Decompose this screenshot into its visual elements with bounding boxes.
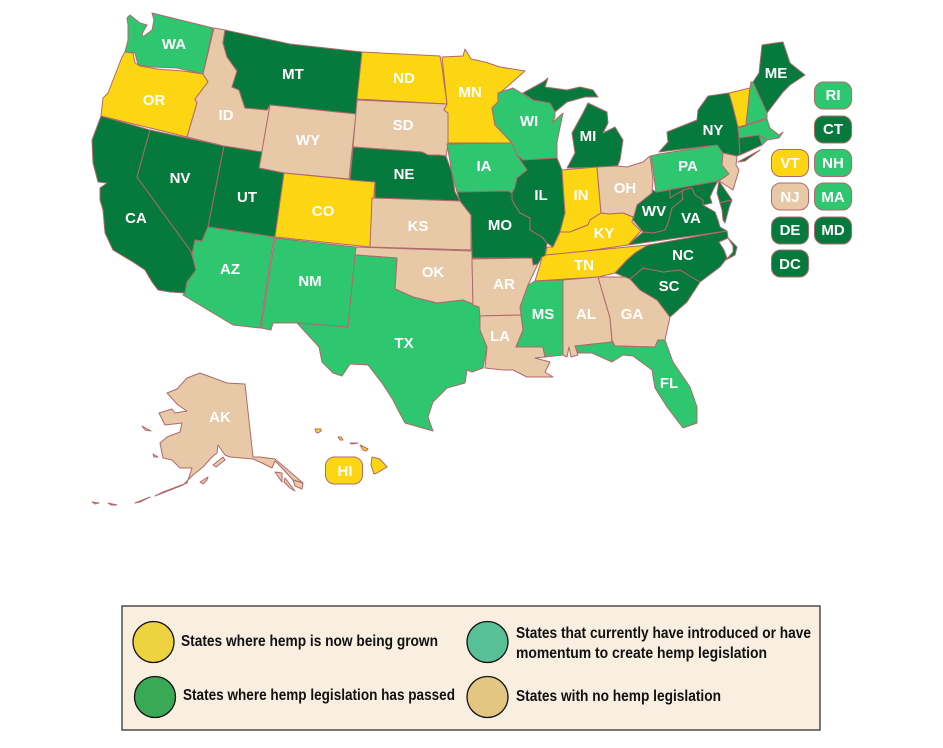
state: KS — [370, 198, 471, 250]
state: IN: IN — [574, 187, 588, 204]
state: NH — [746, 82, 767, 125]
state: VA — [628, 188, 727, 245]
state: AK — [92, 373, 303, 505]
state: CO: CO — [312, 203, 335, 220]
state chips: small states — [326, 82, 852, 484]
state: MN: MN — [458, 84, 482, 101]
chip: DC — [772, 250, 808, 277]
state: NY — [659, 93, 760, 162]
state: VA: VA — [681, 210, 701, 227]
state: MO: MO — [488, 217, 512, 234]
chip: NH: NH — [822, 155, 844, 172]
state: WA: WA — [162, 36, 186, 53]
state: ND: ND — [393, 70, 415, 87]
chip: MA — [814, 183, 852, 210]
legend item: introduced or momentum — [467, 622, 811, 662]
state: WI — [492, 88, 563, 160]
state: ID: ID — [218, 107, 234, 124]
legend item: introduced or momentum: States that currently have introduced or have — [516, 625, 811, 642]
state: MS: MS — [532, 306, 554, 323]
chip: RI — [814, 82, 852, 109]
state: SD: SD — [393, 117, 414, 134]
state: NC — [615, 231, 737, 282]
state: TN: TN — [574, 257, 594, 274]
state: ID — [187, 28, 270, 152]
legend item: legislation passed: States where hemp legislation has passed — [183, 687, 455, 704]
state: AK: AK — [209, 409, 231, 426]
state: OR — [101, 52, 208, 137]
chip: MD: MD — [821, 222, 845, 239]
state: MT — [223, 30, 362, 114]
chip: DE: DE — [780, 222, 800, 239]
state: TN — [535, 245, 648, 281]
state: OR: OR — [143, 92, 165, 109]
state: PA: PA — [678, 158, 698, 175]
state: CO — [275, 173, 375, 247]
legend item: hemp now being grown — [133, 622, 438, 662]
state: ME — [753, 42, 805, 113]
legend item: no legislation — [467, 676, 721, 718]
state: SC: SC — [659, 278, 680, 295]
state: DE — [717, 181, 732, 203]
state: UT: UT — [237, 189, 257, 206]
state: AL: AL — [576, 306, 596, 323]
legend item: legislation passed — [134, 676, 455, 718]
state: UT — [208, 146, 284, 237]
state: ND — [357, 52, 447, 104]
state: FL: FL — [660, 375, 678, 392]
state: MA — [738, 119, 783, 140]
state: GA: GA — [621, 306, 643, 323]
state: IL: IL — [534, 187, 548, 204]
state: WV — [633, 190, 683, 233]
state: WV: WV — [642, 203, 666, 220]
state: HI islands — [315, 429, 387, 474]
state: OK — [355, 247, 473, 305]
state: NV: NV — [170, 170, 190, 187]
state: KS: KS — [408, 218, 428, 235]
state: AZ — [183, 227, 274, 328]
state: TX — [297, 255, 487, 431]
state: MO — [457, 191, 547, 265]
state: NE — [350, 147, 460, 201]
state: NM — [261, 238, 356, 330]
state: MI: MI — [580, 128, 596, 145]
state: TX: TX — [394, 335, 414, 352]
state: ME: ME — [765, 65, 787, 82]
chip: VT — [772, 150, 808, 176]
state: IL — [512, 155, 565, 247]
state: WY — [259, 105, 356, 179]
state: SD — [353, 100, 448, 156]
state: VT — [729, 88, 750, 127]
state: CA: CA — [125, 210, 147, 227]
state: OH — [597, 156, 653, 217]
state: AL — [563, 277, 612, 357]
chip: HI — [326, 457, 362, 484]
state: NE: NE — [394, 166, 414, 183]
chip: NJ — [772, 183, 808, 210]
state: NM: NM — [298, 273, 322, 290]
state: CT — [739, 135, 762, 155]
state: IA: IA — [476, 158, 492, 175]
state: IA — [447, 143, 527, 193]
state: MI — [523, 78, 623, 168]
chip: MD — [814, 217, 852, 244]
state: AZ: AZ — [220, 261, 240, 278]
legend panel — [122, 606, 820, 730]
state: NY: NY — [703, 122, 723, 139]
chip: MA: MA — [821, 189, 845, 206]
state: FL — [575, 340, 697, 428]
state: NJ — [719, 153, 739, 190]
chip: HI: HI — [338, 463, 352, 480]
state: KY: KY — [594, 225, 614, 242]
state: CA — [92, 116, 196, 293]
state: KY — [545, 213, 641, 257]
state: RI — [759, 135, 767, 145]
state: NC: NC — [672, 247, 694, 264]
state: AR: AR — [493, 276, 515, 293]
state: WI: WI — [520, 113, 538, 130]
state: MD — [656, 181, 732, 223]
chip: NH — [814, 150, 852, 176]
state: NV — [137, 130, 224, 255]
state: WA — [125, 13, 213, 74]
state: IN — [560, 167, 601, 232]
chip: DC: DC — [779, 256, 801, 273]
state: MT: MT — [282, 66, 304, 83]
state: LA — [480, 315, 553, 377]
chip: DE — [772, 217, 808, 244]
chip: VT: VT — [780, 155, 800, 172]
state: GA — [598, 277, 670, 347]
state: OK: OK — [422, 264, 444, 281]
legend item: introduced or momentum: momentum to create hemp legislation — [516, 645, 767, 662]
chip: NJ: NJ — [780, 189, 800, 206]
state: AR — [472, 258, 538, 316]
state: SC — [630, 268, 700, 317]
state: MS — [516, 280, 563, 357]
legend item: no legislation: States with no hemp legislation — [516, 688, 721, 705]
chip: CT — [814, 116, 852, 143]
chip: RI: RI — [826, 87, 840, 104]
state: OH: OH — [614, 180, 636, 197]
state: WY: WY — [296, 132, 320, 149]
state: MN — [442, 49, 525, 143]
state: LA: LA — [490, 328, 510, 345]
legend item: hemp now being grown: States where hemp is now being grown — [181, 633, 438, 650]
chip: CT: CT — [823, 121, 843, 138]
state: PA — [651, 145, 729, 192]
map: contiguous United States — [92, 13, 805, 505]
